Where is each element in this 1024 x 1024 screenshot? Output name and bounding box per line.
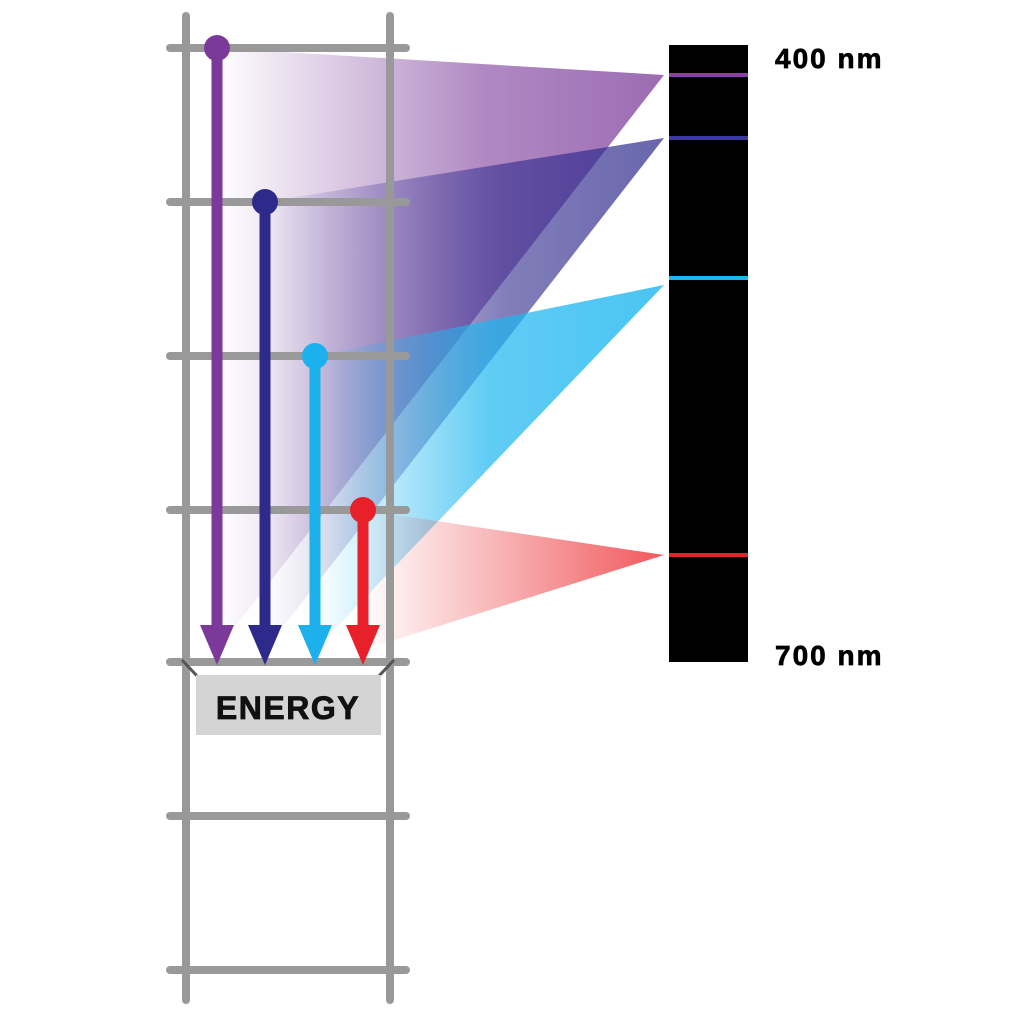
ladder: [170, 16, 406, 1000]
label 400 nm: 400 nm: [775, 43, 884, 74]
energy label: ENERGY: [216, 690, 360, 726]
energy label: [182, 660, 394, 735]
spectrum bar: [669, 45, 748, 662]
light beams: [217, 48, 664, 650]
label 700 nm: 700 nm: [775, 640, 884, 671]
arrows: [200, 35, 380, 665]
